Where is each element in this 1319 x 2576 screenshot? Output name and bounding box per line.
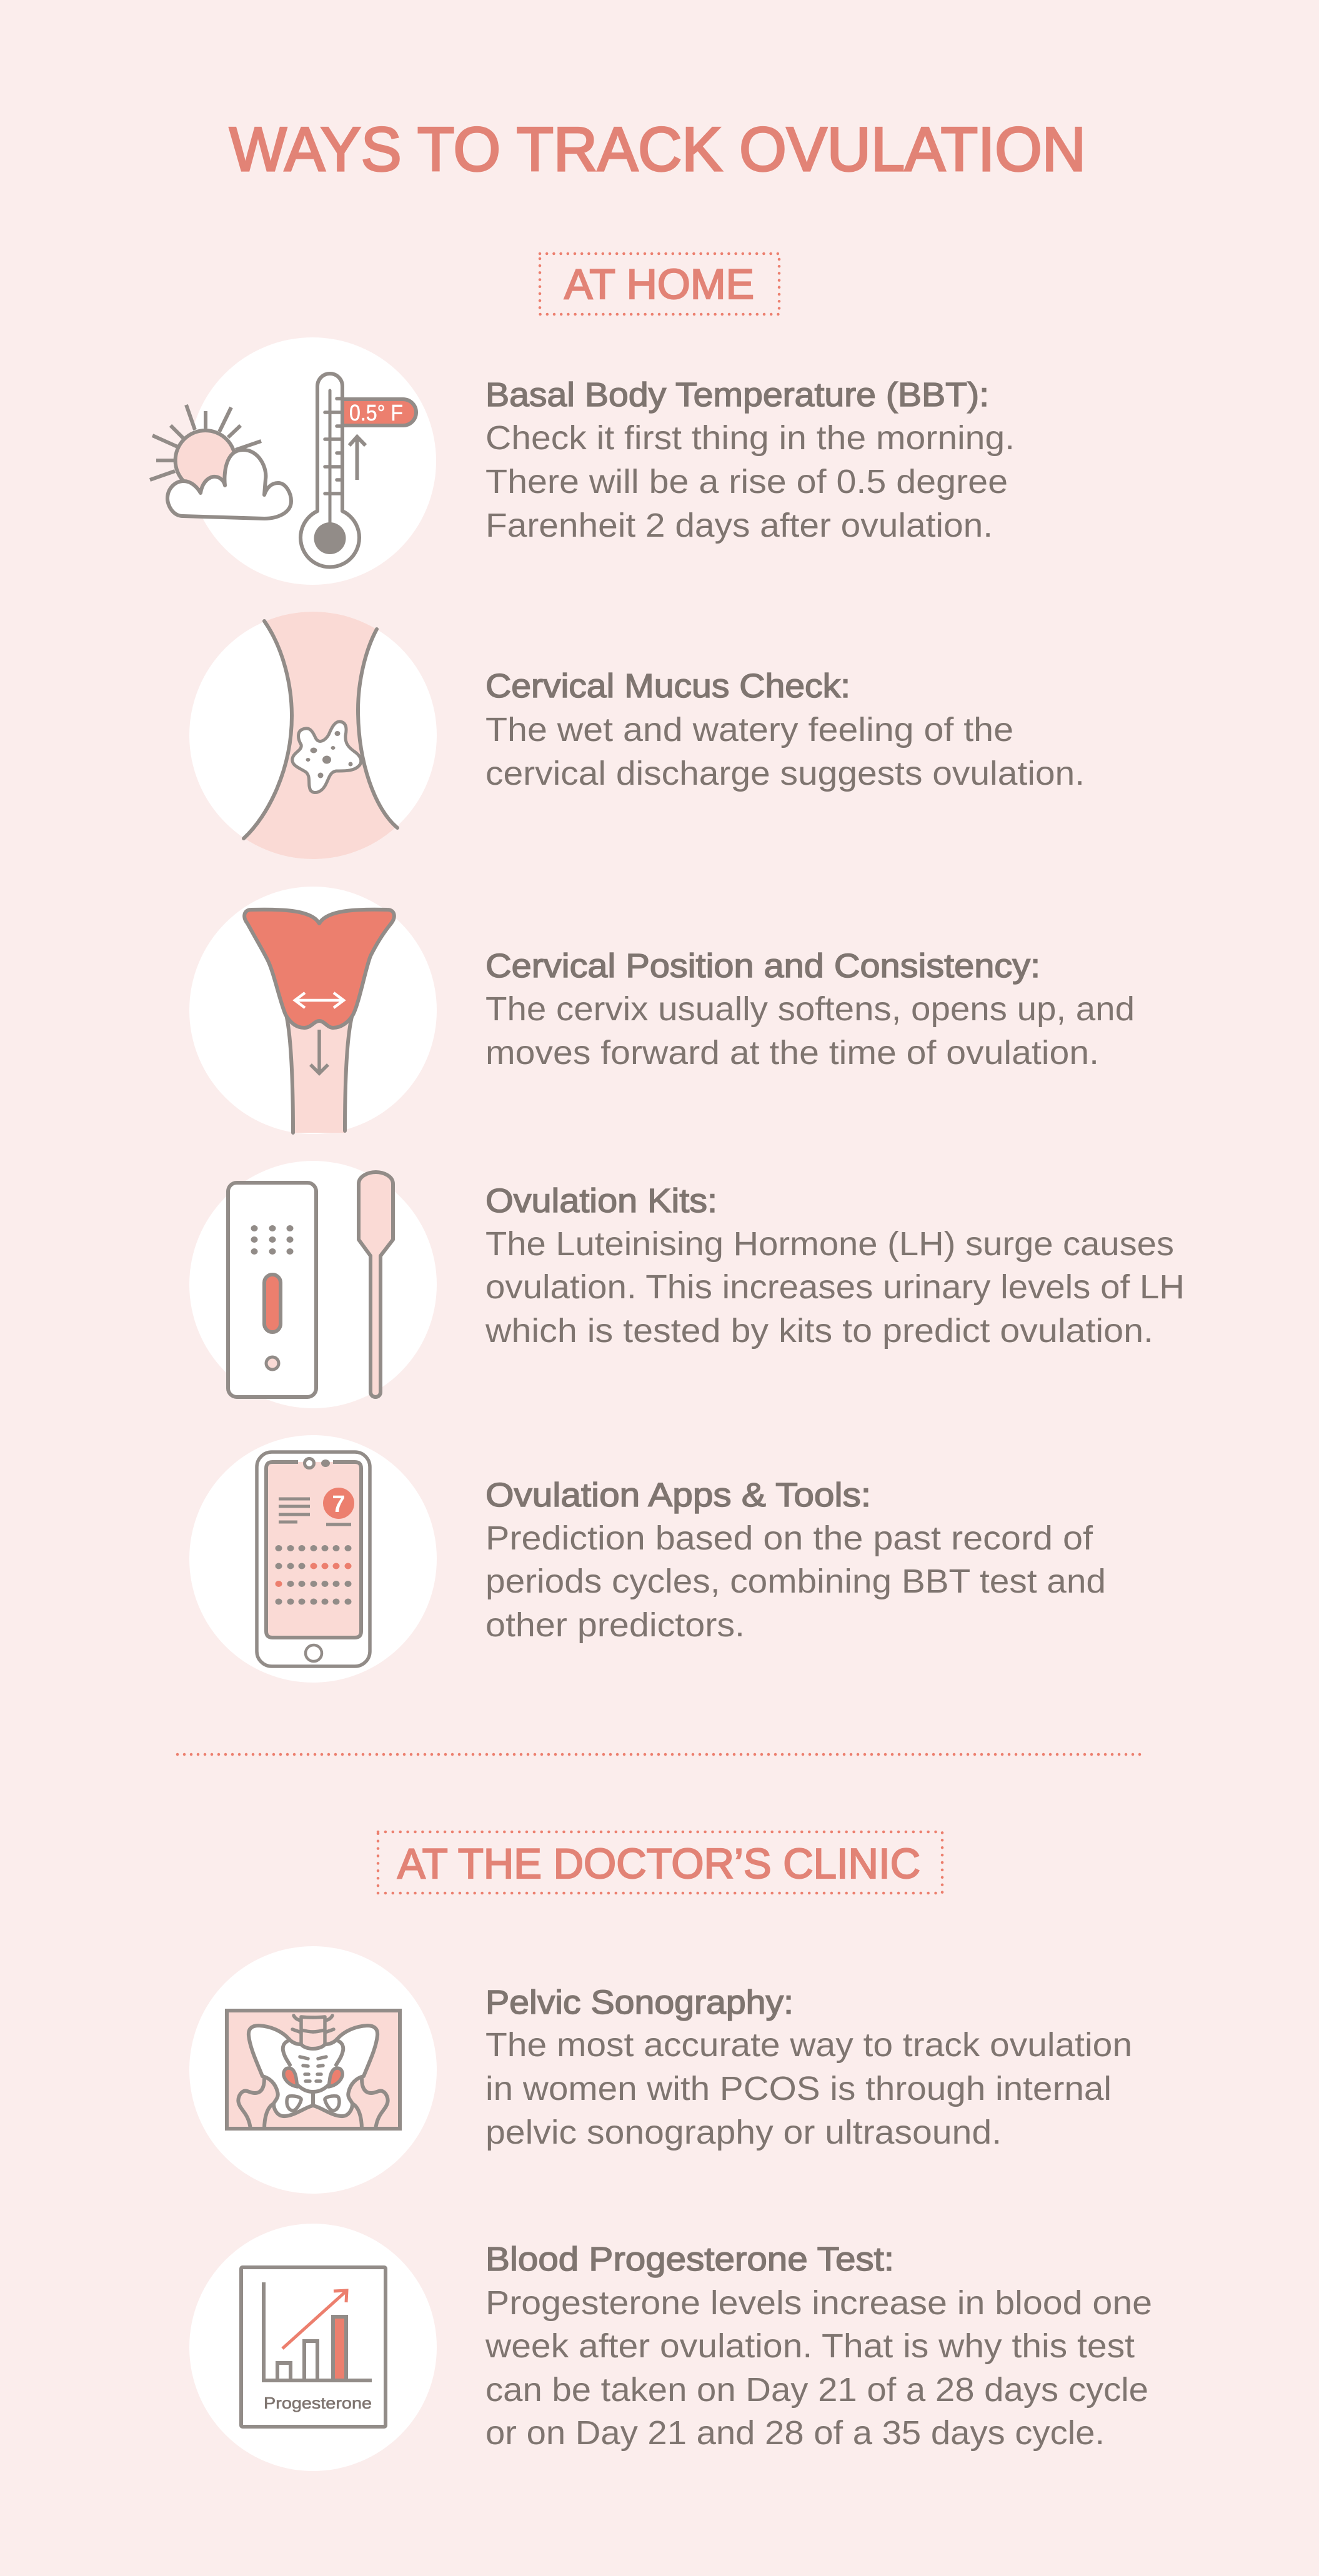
text: blood progesterone: week after ovulation. That is why this test — [485, 2327, 1135, 2365]
panel: cervical mucus check — [189, 612, 1082, 859]
text: pelvic sonography: The most accurate way to track ovulation — [485, 2026, 1132, 2064]
arrow: cervix moving down — [311, 1030, 328, 1073]
title: WAYS TO TRACK OVULATION — [229, 114, 1086, 184]
text: blood progesterone: Blood Progesterone Test: — [485, 2240, 894, 2278]
text: BBT: There will be a rise of 0.5 degree — [485, 463, 1008, 500]
text: pelvic sonography: in women with PCOS is through internal — [485, 2070, 1112, 2107]
text: ovulation apps: periods cycles, combining BBT test and — [485, 1563, 1106, 1600]
text: BBT: Check it first thing in the morning. — [485, 419, 1015, 457]
text: blood progesterone: or on Day 21 and 28 of a 35 days cycle. — [485, 2414, 1105, 2452]
section heading: at home — [540, 254, 779, 314]
text: ovulation kits: ovulation. This increases urinary levels of LH — [485, 1268, 1185, 1306]
text: cervical mucus — [485, 667, 1085, 792]
text: ovulation kits: which is tested by kits to predict ovulation. — [485, 1312, 1153, 1350]
text: ovulation apps — [485, 1476, 1106, 1644]
icon: thermometer — [301, 374, 416, 567]
text: ovulation apps: Ovulation Apps & Tools: — [485, 1476, 871, 1514]
text: cervical position: moves forward at the time of ovulation. — [485, 1034, 1099, 1072]
text: BBT: Farenheit 2 days after ovulation. — [485, 507, 993, 544]
icon: sun behind cloud — [150, 405, 291, 519]
badge: 0.5 F: 0.5° F — [349, 400, 403, 425]
icon: test cassette — [228, 1183, 316, 1397]
arrow: cervix widening — [295, 993, 344, 1008]
text: cervical position: Cervical Position and Consistency: — [485, 947, 1040, 985]
icon: cervical canal with mucus — [244, 594, 397, 875]
icon: uterus and cervix — [244, 910, 394, 1133]
arrow: temperature up — [349, 437, 366, 480]
panel: pelvic sonography — [189, 1946, 1132, 2194]
text: blood progesterone — [485, 2240, 1152, 2452]
text: cervical position: The cervix usually softens, opens up, and — [485, 990, 1135, 1028]
text: ovulation apps: Prediction based on the past record of — [485, 1519, 1093, 1557]
panel: ovulation apps and tools — [189, 1435, 1106, 1683]
text: blood progesterone: Progesterone levels increase in blood one — [485, 2284, 1152, 2322]
section heading: at home: AT HOME — [564, 261, 754, 308]
panel: ovulation kits — [189, 1161, 1185, 1408]
text: pelvic sonography: Pelvic Sonography: — [485, 1984, 794, 2021]
icon: dropper — [359, 1172, 393, 1397]
text: ovulation kits: The Luteinising Hormone (LH) surge causes — [485, 1225, 1174, 1263]
text: pelvic sonography — [485, 1984, 1132, 2151]
text: BBT: Basal Body Temperature (BBT): — [485, 376, 989, 414]
icon: smartphone calendar app — [257, 1452, 370, 1666]
text: blood progesterone: can be taken on Day 21 of a 28 days cycle — [485, 2371, 1148, 2409]
text: ovulation kits — [485, 1182, 1185, 1350]
text: pelvic sonography: pelvic sonography or ultrasound. — [485, 2114, 1002, 2151]
panel: basal body temperature — [150, 337, 1015, 585]
icon: progesterone chart: Progesterone — [264, 2394, 372, 2412]
text: ovulation kits: Ovulation Kits: — [485, 1182, 717, 1220]
section heading: at the doctor's clinic: AT THE DOCTOR’S CLINIC — [397, 1840, 920, 1887]
icon: progesterone chart — [241, 2267, 386, 2427]
text: BBT — [485, 376, 1015, 544]
text: cervical mucus: cervical discharge suggests ovulation. — [485, 755, 1085, 792]
icon: smartphone calendar app: 7 — [332, 1491, 346, 1518]
text: ovulation apps: other predictors. — [485, 1606, 745, 1644]
arrow: rising levels — [282, 2290, 347, 2349]
text: cervical mucus: The wet and watery feeling of the — [485, 711, 1013, 748]
icon: pelvis scan — [227, 2011, 400, 2129]
panel: blood progesterone test — [189, 2224, 1152, 2471]
text: cervical mucus: Cervical Mucus Check: — [485, 667, 850, 705]
panel: cervical position and consistency — [189, 887, 1135, 1134]
text: cervical position — [485, 947, 1135, 1072]
